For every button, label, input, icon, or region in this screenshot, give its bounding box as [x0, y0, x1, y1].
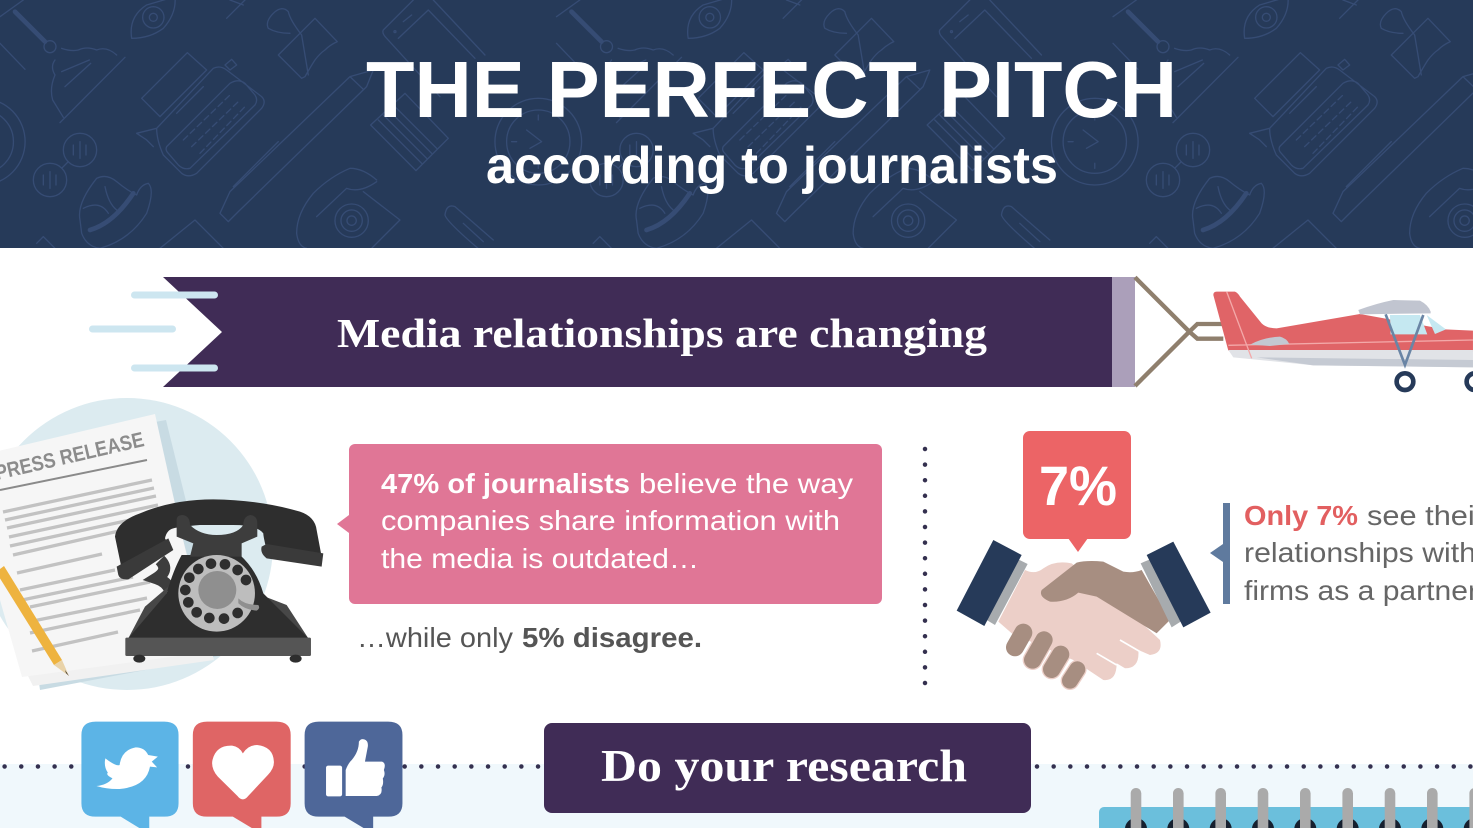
- callout badge: 7%: [1023, 431, 1131, 552]
- text: only 7% see their relationships: see their: [1367, 500, 1473, 531]
- text: only 5% disagree: …while only: [357, 622, 513, 653]
- subtitle: according to journalists: [486, 137, 1058, 195]
- telephone: [115, 499, 323, 663]
- icon: twitter bubble: [81, 722, 179, 828]
- text: only 5% disagree: [357, 622, 702, 653]
- icon: thumbs up bubble: [305, 722, 402, 828]
- callout badge: 7%: 7%: [1039, 454, 1117, 517]
- social icons: [81, 722, 402, 828]
- section heading: Do your research: [544, 723, 1031, 813]
- callout: 47% of journalists: believe the way: [639, 468, 853, 499]
- title: THE PERFECT PITCH: [366, 45, 1177, 134]
- text: only 5% disagree: 5% disagree.: [522, 622, 702, 653]
- callout: 47% of journalists: 47% of journalists: [381, 468, 630, 499]
- icon: heart bubble: [193, 722, 291, 828]
- text: only 7% see their relationships: relationships with: [1244, 537, 1473, 568]
- text: only 7% see their relationships: [1210, 500, 1473, 606]
- text: only 7% see their relationships: firms as a partner: [1244, 575, 1473, 606]
- callout: 47% of journalists: the media is outdated…: [381, 543, 699, 574]
- section banner: Media relationships are changing: [92, 277, 1135, 387]
- icon: spiral notebook: [1099, 788, 1473, 828]
- icon: handshake: [957, 540, 1211, 681]
- banner heading: Media relationships are changing: [337, 310, 988, 356]
- illustration: press release and telephone: [0, 398, 323, 690]
- callout: 47% of journalists: [337, 444, 882, 604]
- text: only 7% see their relationships: Only 7%: [1244, 500, 1358, 531]
- press release sheet: [0, 414, 224, 690]
- callout: 47% of journalists: companies share information with: [381, 505, 840, 536]
- pencil: [0, 566, 69, 676]
- icon: plane towing banner: [1135, 277, 1473, 390]
- section heading: Do your research: Do your research: [601, 740, 967, 791]
- header banner: [0, 0, 1473, 267]
